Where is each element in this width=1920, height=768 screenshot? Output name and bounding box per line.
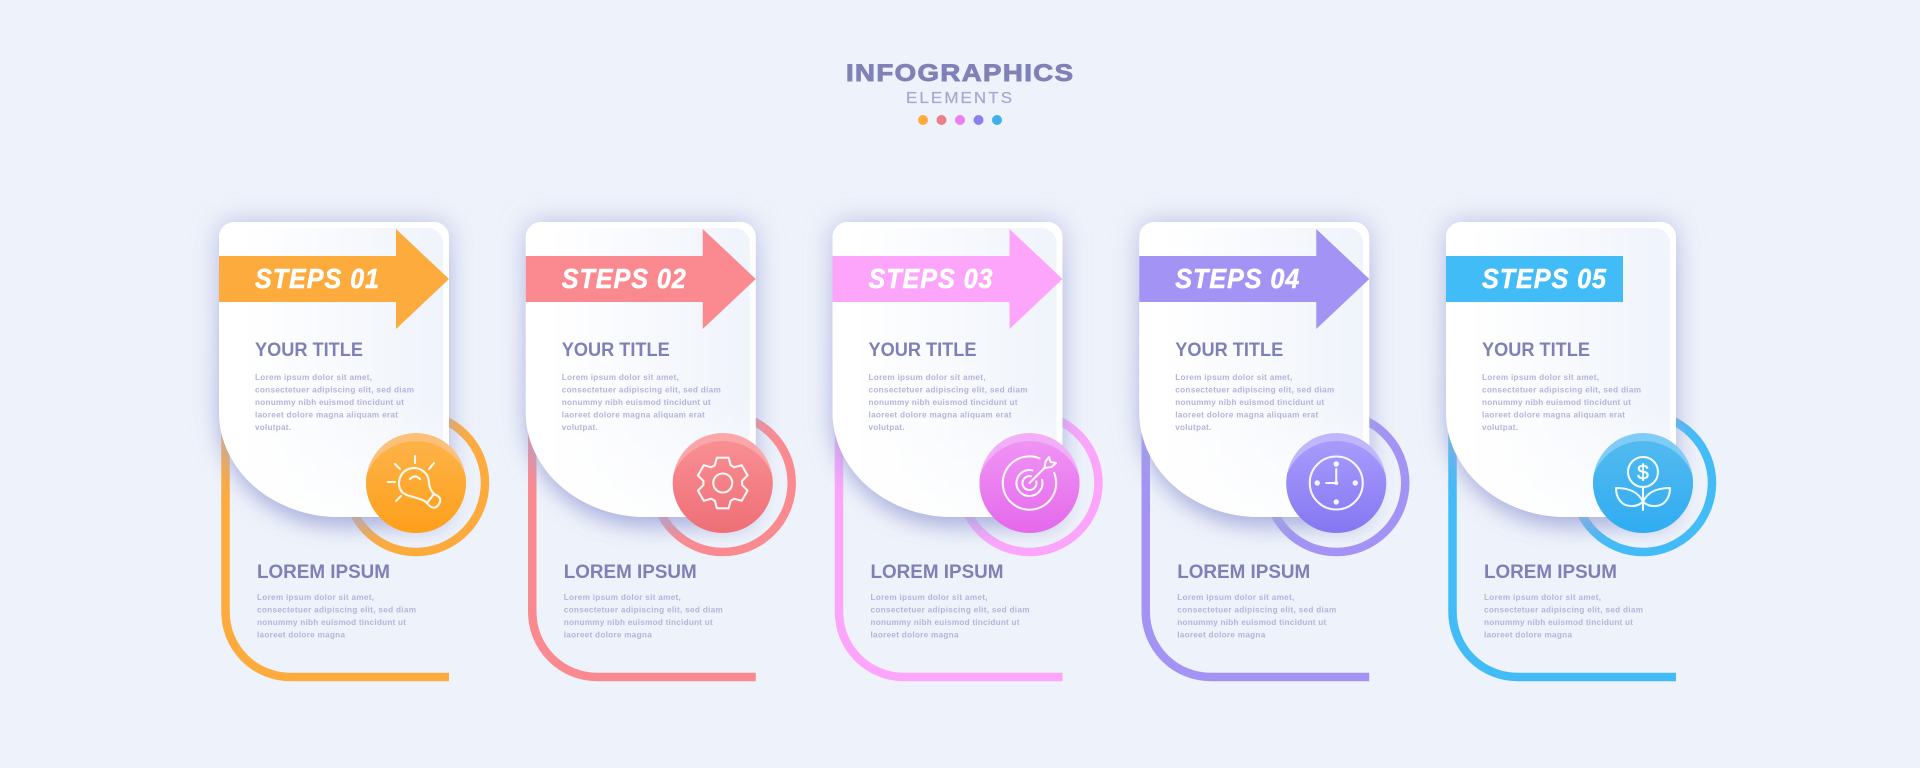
card body text: consectetuer adipiscing elit, sed diam	[255, 386, 414, 394]
panel: step 5	[1446, 222, 1712, 677]
secondary heading: LOREM IPSUM	[1484, 561, 1617, 583]
secondary body text: laoreet dolore magna	[1484, 630, 1572, 640]
card body text: consectetuer adipiscing elit, sed diam	[1175, 386, 1334, 394]
arrow banner	[526, 229, 756, 329]
card body text: laoreet dolore magna aliquam erat	[255, 410, 398, 420]
secondary body text: consectetuer adipiscing elit, sed diam	[1484, 606, 1643, 614]
icon disc	[1286, 433, 1386, 533]
secondary body text: nonummy nibh euismod tincidunt ut	[564, 618, 713, 627]
secondary body text: laoreet dolore magna	[1177, 630, 1266, 640]
icon: light bulb	[388, 456, 440, 508]
card body text: Lorem ipsum dolor sit amet,	[1175, 373, 1292, 382]
card heading: YOUR TITLE	[868, 339, 976, 361]
secondary body text: Lorem ipsum dolor sit amet,	[564, 593, 681, 602]
step label: STEPS 02	[562, 263, 686, 294]
frame line and ring	[1452, 414, 1712, 677]
white card	[526, 222, 756, 526]
step label: STEPS 05	[1482, 263, 1607, 294]
white card	[832, 222, 1062, 526]
secondary body text: laoreet dolore magna	[564, 630, 652, 640]
frame line and ring	[532, 414, 792, 677]
icon disc	[366, 433, 466, 533]
step label: STEPS 03	[868, 263, 993, 294]
secondary body text: consectetuer adipiscing elit, sed diam	[564, 606, 723, 614]
secondary heading: LOREM IPSUM	[1177, 561, 1310, 583]
white card	[1139, 222, 1369, 526]
card body text	[255, 373, 414, 432]
secondary heading: LOREM IPSUM	[870, 561, 1004, 583]
step label: STEPS 01	[255, 263, 379, 294]
secondary body text: nonummy nibh euismod tincidunt ut	[1177, 618, 1327, 627]
step label: STEPS 04	[1175, 263, 1299, 294]
card body text	[868, 373, 1028, 432]
card body text: nonummy nibh euismod tincidunt ut	[1175, 398, 1325, 407]
card body text: Lorem ipsum dolor sit amet,	[1482, 373, 1599, 382]
secondary heading: LOREM IPSUM	[564, 561, 697, 583]
secondary body text: nonummy nibh euismod tincidunt ut	[870, 618, 1020, 627]
arrow banner	[832, 229, 1062, 329]
card body text	[1175, 373, 1334, 432]
secondary heading: LOREM IPSUM	[257, 561, 390, 583]
card body text: nonummy nibh euismod tincidunt ut	[562, 398, 711, 407]
colour dots	[918, 115, 1002, 125]
icon: money plant	[1616, 457, 1670, 510]
card body text: nonummy nibh euismod tincidunt ut	[255, 398, 404, 407]
secondary body text: Lorem ipsum dolor sit amet,	[870, 593, 988, 602]
card body text: consectetuer adipiscing elit, sed diam	[1482, 386, 1641, 394]
card heading: YOUR TITLE	[1175, 339, 1283, 361]
title block	[846, 61, 1073, 125]
card body text: laoreet dolore magna aliquam erat	[562, 410, 705, 420]
card body text: volutpat.	[868, 423, 904, 432]
subtitle: elements: ELEMENTS	[906, 90, 1012, 107]
arrow banner	[219, 229, 449, 329]
card body text: volutpat.	[255, 423, 291, 432]
card heading: YOUR TITLE	[1482, 339, 1590, 361]
secondary body text	[564, 593, 723, 640]
white card	[1446, 222, 1676, 526]
frame line and ring	[839, 414, 1098, 677]
card body text	[562, 373, 721, 432]
arrow banner	[1139, 229, 1369, 329]
icon disc	[980, 433, 1080, 533]
card body text: Lorem ipsum dolor sit amet,	[255, 373, 372, 382]
secondary body text: Lorem ipsum dolor sit amet,	[1177, 593, 1294, 602]
icon: target with arrow	[1003, 456, 1056, 510]
frame line and ring	[1146, 414, 1405, 677]
secondary body text: Lorem ipsum dolor sit amet,	[1484, 593, 1601, 602]
secondary body text: laoreet dolore magna	[870, 630, 959, 640]
secondary body text	[1177, 593, 1336, 640]
card heading: YOUR TITLE	[562, 339, 670, 361]
card body text: laoreet dolore magna aliquam erat	[1175, 410, 1319, 420]
icon: clock	[1310, 456, 1363, 510]
card body text: volutpat.	[562, 423, 598, 432]
white card	[219, 222, 449, 526]
card heading: YOUR TITLE	[255, 339, 363, 361]
card body text: nonummy nibh euismod tincidunt ut	[868, 398, 1018, 407]
panel: step 3	[832, 222, 1098, 677]
card body text: volutpat.	[1482, 423, 1518, 432]
card body text: Lorem ipsum dolor sit amet,	[562, 373, 679, 382]
banner	[1446, 256, 1623, 302]
secondary body text: nonummy nibh euismod tincidunt ut	[1484, 618, 1633, 627]
secondary body text: nonummy nibh euismod tincidunt ut	[257, 618, 406, 627]
secondary body text	[870, 593, 1030, 640]
icon disc	[672, 433, 773, 533]
card body text: nonummy nibh euismod tincidunt ut	[1482, 398, 1631, 407]
panel: step 2	[526, 222, 792, 677]
card body text: consectetuer adipiscing elit, sed diam	[868, 386, 1028, 394]
secondary body text	[257, 593, 416, 640]
card body text: volutpat.	[1175, 423, 1211, 432]
icon disc	[1593, 433, 1693, 533]
icon: money plant: $	[1637, 462, 1649, 484]
card body text	[1482, 373, 1641, 432]
panel: step 4	[1139, 222, 1405, 677]
card body text: laoreet dolore magna aliquam erat	[868, 410, 1012, 420]
panel: step 1	[219, 222, 485, 677]
frame line and ring	[226, 414, 485, 677]
card body text: consectetuer adipiscing elit, sed diam	[562, 386, 721, 394]
secondary body text: consectetuer adipiscing elit, sed diam	[870, 606, 1030, 614]
card body text: Lorem ipsum dolor sit amet,	[868, 373, 986, 382]
secondary body text	[1484, 593, 1643, 640]
title: infographics: INFOGRAPHICS	[846, 61, 1073, 87]
secondary body text: Lorem ipsum dolor sit amet,	[257, 593, 374, 602]
icon: gear	[698, 458, 748, 508]
secondary body text: consectetuer adipiscing elit, sed diam	[1177, 606, 1336, 614]
secondary body text: laoreet dolore magna	[257, 630, 345, 640]
card body text: laoreet dolore magna aliquam erat	[1482, 410, 1625, 420]
secondary body text: consectetuer adipiscing elit, sed diam	[257, 606, 416, 614]
